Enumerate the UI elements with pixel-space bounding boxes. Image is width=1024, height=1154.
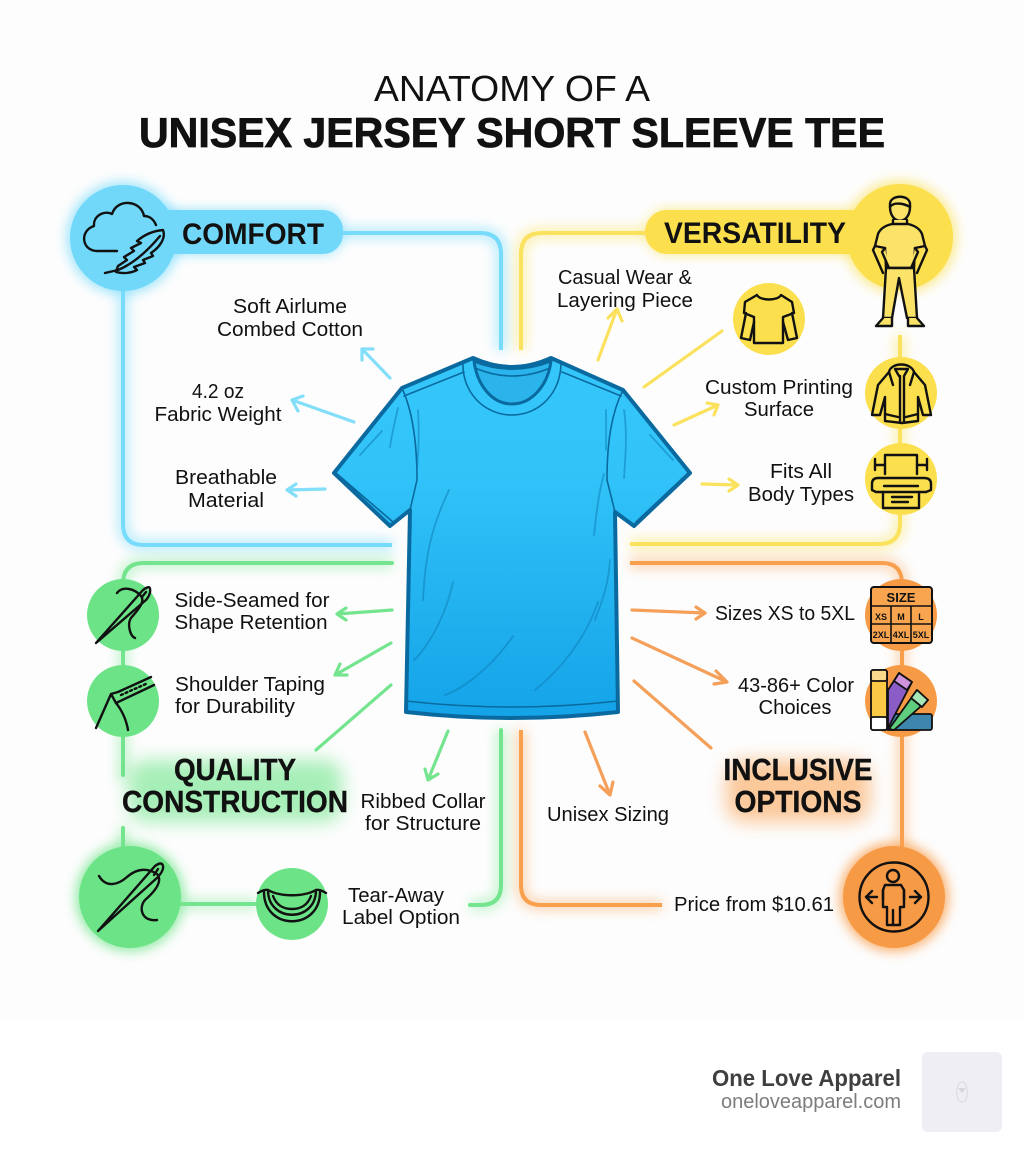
text: side-seamed: Shape Retention [174,612,328,634]
arrows: quality [316,608,448,780]
text: soft airlume combed cotton [217,296,363,341]
text: custom printing surface: Surface [744,399,814,421]
inner neck [474,361,551,404]
heading: quality construction [122,752,348,819]
versatility frame line [521,233,900,544]
text: custom printing surface [705,377,853,421]
illustration: blue t-shirt [334,358,690,718]
arrows: versatility [598,309,738,491]
icon circle: layered shirt [733,283,805,355]
arrows: comfort [287,349,390,496]
text: fabric weight [154,381,282,426]
icon circle: tear-away label [256,868,328,940]
text: fits all body types [748,461,854,506]
text: soft airlume combed cotton: Combed Cotton [217,319,363,341]
text: ribbed collar: for Structure [365,813,481,835]
text: ribbed collar: Ribbed Collar [360,791,486,813]
text: breathable material: Breathable [175,467,277,489]
text: color choices: 43-86+ Color [738,675,854,697]
comfort frame line [123,233,501,545]
icon circle: jacket [865,357,937,429]
text: ribbed collar [360,791,486,835]
text: fits all body types: Body Types [748,484,854,506]
text: soft airlume combed cotton: Soft Airlume [233,296,347,318]
icon: person [873,197,927,326]
heading: inclusive options: INCLUSIVE [724,752,872,787]
heading: comfort: COMFORT [182,218,324,251]
icon circle: shoulder taping [87,665,159,737]
text: casual wear and layering piece: Casual Wear & [558,267,693,289]
text: casual wear and layering piece: Layering Piece [557,290,693,312]
comfort pill [150,210,343,254]
heading: quality construction: CONSTRUCTION [122,784,348,819]
text: tear-away label [342,885,460,929]
title [139,68,885,156]
icon circle: needle [87,579,159,651]
heading: inclusive options [724,752,872,819]
icon circle: size chart: XS [875,612,887,622]
text: color choices: Choices [758,697,832,719]
text: tear-away label: Label Option [342,907,460,929]
icon circle: size chart: 5XL [913,630,930,640]
green frame line [123,563,501,905]
text: shoulder taping: for Durability [175,696,295,718]
text: tear-away label: Tear-Away [348,885,444,907]
icon circle: color swatches [865,665,937,737]
panel: quality construction [76,563,501,951]
footer brand [712,1065,901,1113]
icon circle: size chart [865,579,937,651]
footer brand: One Love Apparel [712,1065,901,1091]
text: casual wear and layering piece [557,267,693,312]
icon circle: size chart: L [918,612,924,622]
versatility badge circle [847,184,953,290]
panel: comfort [67,182,501,545]
text: price: Price from $10.61 [674,894,834,916]
text: breathable material: Material [188,490,264,512]
text: unisex sizing: Unisex Sizing [547,804,669,826]
panel: inclusive options [521,563,948,951]
text: sizes: Sizes XS to 5XL [715,603,855,625]
text: side-seamed: Side-Seamed for [174,590,330,612]
text: fabric weight: Fabric Weight [154,404,282,426]
versatility pill [645,210,880,254]
footer brand: oneloveapparel.com [721,1091,901,1113]
heading: versatility: VERSATILITY [664,217,846,250]
icon circle: person with arrows [843,846,945,948]
text: fits all body types: Fits All [770,461,832,483]
text: shoulder taping: Shoulder Taping [175,674,325,696]
text: side-seamed [174,590,330,634]
heading: quality construction: QUALITY [174,752,296,787]
title: UNISEX JERSEY SHORT SLEEVE TEE [139,109,885,156]
text: custom printing surface: Custom Printing [705,377,853,399]
icon circle: size chart: SIZE [887,590,916,605]
text: color choices [738,675,854,719]
shirt folds [360,408,673,695]
orange frame line [521,563,902,905]
shirt seams [336,363,688,707]
icon circle: needle and thread [79,846,181,948]
title: ANATOMY OF A [374,68,650,109]
icon circle: printer [865,443,937,515]
footer logo placeholder [922,1052,1002,1132]
text: breathable material [175,467,277,512]
icon circle: size chart: 4XL [893,630,910,640]
text: shoulder taping [175,674,325,718]
heading: inclusive options: OPTIONS [734,784,862,819]
comfort badge circle [70,185,176,291]
panel: versatility [521,181,956,544]
icon circle: size chart: 2XL [873,630,890,640]
arrows: inclusive [585,607,727,795]
icon circle: size chart: M [897,612,905,622]
text: fabric weight: 4.2 oz [192,381,244,403]
icon: cloud and feather [84,203,164,273]
